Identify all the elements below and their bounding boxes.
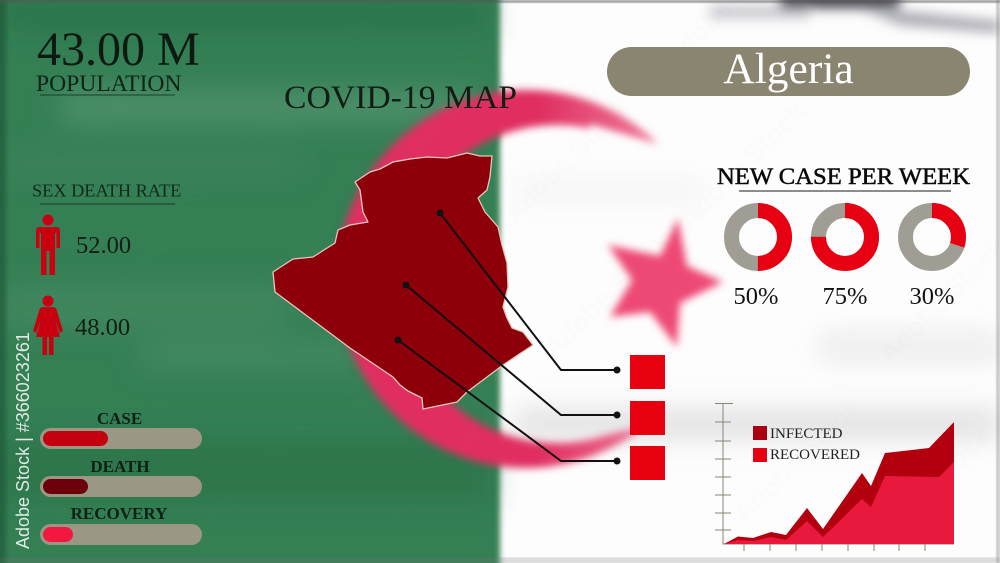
progress bars (40, 409, 202, 545)
icon: female figure (33, 296, 63, 355)
donut values: 50% (734, 283, 778, 310)
watermarks: Adobe Stock (728, 391, 867, 529)
map heading: COVID-19 MAP (284, 80, 517, 116)
country pill: Algeria (723, 45, 854, 93)
population value: 43.00 M (37, 23, 200, 76)
donut values: 75% (823, 283, 867, 310)
area chart (715, 403, 954, 551)
watermarks: Adobe Stock (673, 96, 812, 234)
donut values (734, 283, 954, 310)
watermarks: Adobe Stock (208, 216, 347, 354)
death bar: DEATH (90, 457, 150, 476)
donut 50% (732, 210, 784, 264)
donut 75% (818, 210, 872, 264)
leader lines (394, 210, 620, 464)
watermarks: Adobe Stock (538, 226, 677, 364)
chart axes (715, 403, 954, 551)
panel heading: NEW CASE PER WEEK (717, 164, 970, 189)
recovery bar: RECOVERY (71, 504, 167, 523)
male rate: 52.00 (76, 232, 131, 259)
icon: male figure (36, 214, 60, 275)
population label: POPULATION (36, 71, 182, 97)
red data squares (630, 355, 665, 480)
watermarks: Adobe Stock (333, 261, 472, 399)
country pill (607, 45, 970, 96)
watermarks: Adobe Stock (378, 391, 517, 529)
donut 30% (906, 210, 958, 264)
recovered area (724, 462, 954, 544)
sex death rate heading: SEX DEATH RATE (32, 180, 181, 200)
death bar (40, 457, 202, 497)
stock id vertical label: Adobe Stock | #366023261 (13, 332, 33, 549)
recovery bar (40, 504, 202, 545)
donut values: 30% (910, 283, 954, 310)
legend: recovered: RECOVERED (770, 447, 860, 463)
map of Algeria (273, 153, 533, 409)
watermarks: Adobe Stock (178, 411, 317, 549)
flag crescent (336, 83, 660, 475)
population block (36, 23, 200, 97)
watermarks: Adobe Stock (165, 88, 304, 226)
watermarks: Adobe Stock (38, 51, 177, 189)
watermarks: Adobe Stock (43, 391, 182, 529)
case bar: CASE (97, 409, 142, 428)
watermarks: Adobe Stock (503, 421, 642, 559)
legend: infected: INFECTED (770, 426, 843, 442)
infected area (724, 422, 954, 544)
flag star (608, 218, 723, 347)
watermarks: Adobe Stock (368, 56, 507, 194)
case bar (40, 409, 202, 449)
watermarks: Adobe Stock (858, 421, 997, 559)
watermarks: Adobe Stock (43, 221, 182, 359)
female rate: 48.00 (75, 314, 130, 341)
new case per week panel (717, 164, 970, 310)
sex death rate block (32, 180, 181, 355)
watermarks: Adobe Stock (498, 91, 637, 229)
